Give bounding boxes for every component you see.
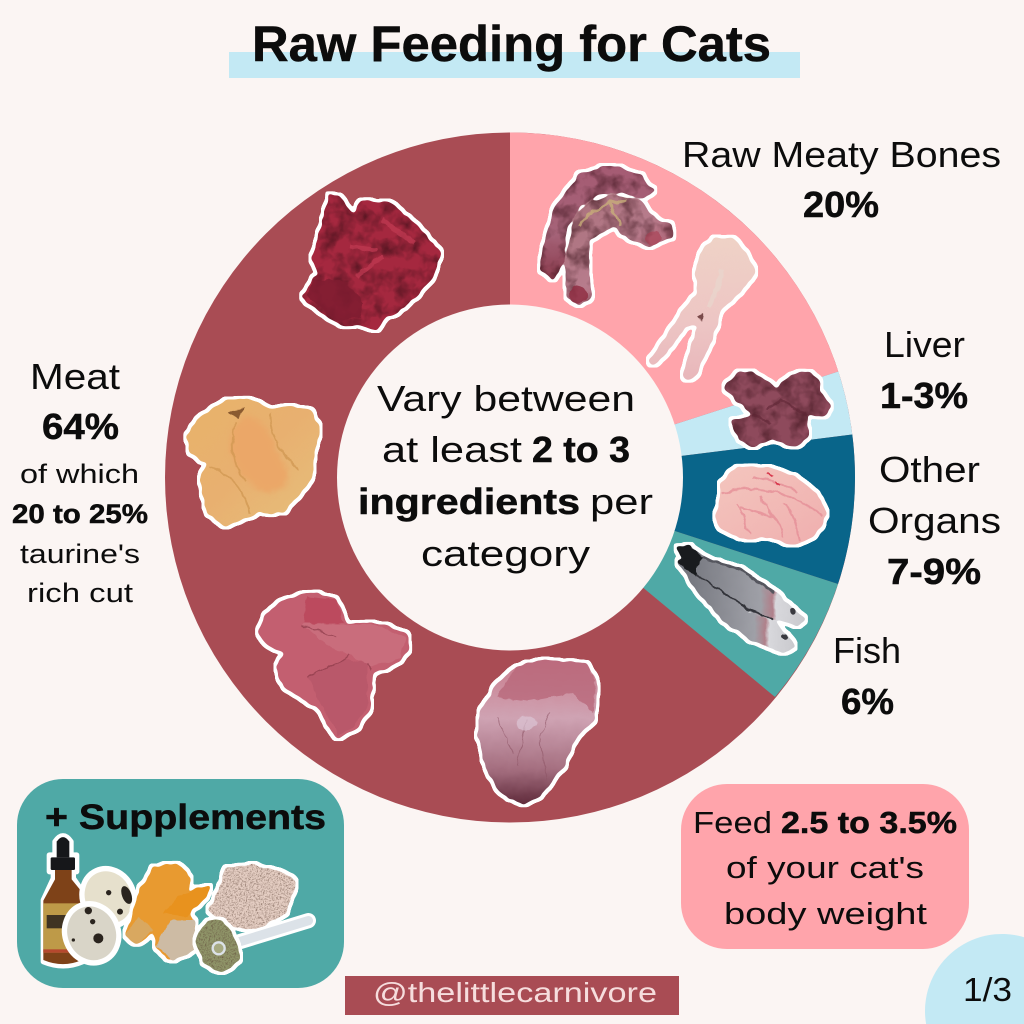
donut chart — [165, 132, 855, 822]
centre text: ingredients — [358, 481, 580, 522]
label: meat: rich cut — [27, 578, 134, 608]
icon: whole chicken carcass — [649, 238, 755, 382]
centre text: 2 to 3 — [532, 429, 630, 470]
icon: beef chunks top — [302, 195, 442, 332]
mussels — [125, 863, 210, 962]
icon: brain — [715, 467, 828, 547]
segment: other organs 7-9% — [510, 434, 855, 584]
panel: supplements — [17, 779, 344, 988]
label: meat: of which — [20, 459, 139, 489]
label: raw meaty bones: 20% — [803, 184, 879, 225]
bottle — [43, 836, 83, 966]
icon: liver — [723, 372, 832, 448]
handle banner: @thelittlecarnivore — [373, 977, 657, 1008]
centre text: Vary between — [377, 378, 635, 419]
segment: meat 64% — [165, 132, 855, 822]
icon: two fish — [675, 545, 807, 653]
heading: supplements: + Supplements — [45, 798, 326, 837]
label: fish — [833, 630, 901, 722]
label: fish: Fish — [833, 630, 901, 671]
title: Raw Feeding for Cats — [252, 16, 771, 72]
label: other organs: Organs — [868, 500, 1001, 541]
label: liver — [880, 324, 968, 416]
segment: liver 1-3% — [510, 372, 852, 478]
label: liver: 1-3% — [880, 375, 968, 416]
centre text: per — [590, 481, 653, 522]
panel: feeding amount callout: body weight — [724, 896, 927, 931]
icon: supplement foods — [43, 836, 308, 973]
label: meat: 20 to 25% — [12, 499, 148, 529]
label: fish: 6% — [841, 681, 894, 722]
segment: fish 6% — [510, 478, 838, 697]
label: other organs: 7-9% — [887, 551, 981, 592]
centre text: category — [421, 533, 590, 574]
label: meat: 64% — [42, 406, 119, 447]
icon: chicken necks — [540, 165, 673, 307]
centre text: at least — [382, 429, 522, 470]
label: other organs: Other — [879, 449, 980, 490]
panel: feeding amount callout: Feed — [693, 805, 772, 840]
page number badge — [925, 934, 1024, 1024]
label: meat — [12, 356, 148, 608]
powder and scoop — [195, 865, 308, 973]
panel: feeding amount callout: 2.5 to 3.5% — [781, 805, 957, 840]
label: raw meaty bones — [682, 134, 1001, 225]
label: raw meaty bones: Raw Meaty Bones — [682, 134, 1001, 175]
label: meat: taurine's — [20, 539, 140, 569]
centre text — [358, 378, 653, 574]
icon: chicken thigh — [187, 398, 320, 527]
panel: feeding amount callout — [681, 784, 969, 949]
centre hole — [337, 304, 683, 650]
page number badge: 1/3 — [963, 971, 1012, 1008]
handle banner — [345, 976, 679, 1015]
label: liver: Liver — [884, 324, 965, 365]
eggs — [56, 860, 144, 971]
icon: beef chunks bottom — [258, 592, 410, 738]
label: meat: Meat — [30, 356, 120, 397]
label: other organs — [868, 449, 1001, 592]
segment: raw meaty bones 20% — [510, 132, 838, 478]
panel: feeding amount callout: of your cat's — [726, 850, 924, 885]
icon: heart — [477, 660, 597, 805]
